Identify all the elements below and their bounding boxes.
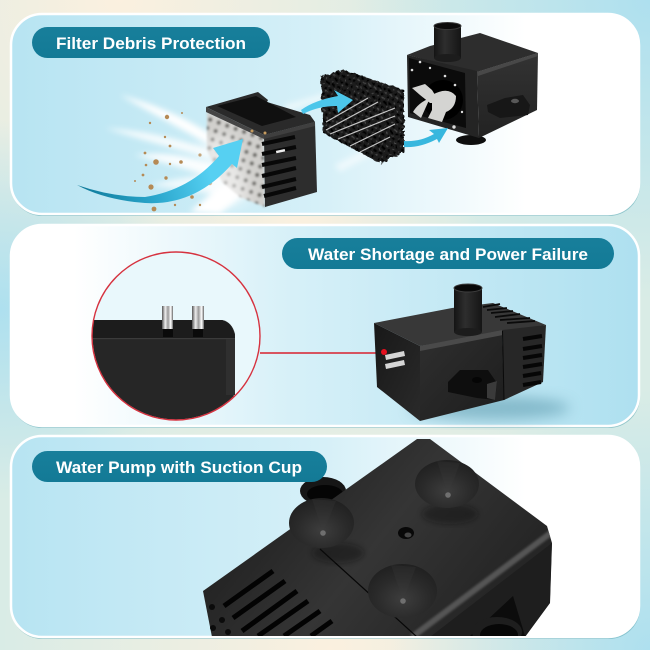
lower blue arrow <box>404 128 448 147</box>
heading pill: filter debris protection <box>32 27 270 58</box>
heading pill: water shortage <box>282 238 614 269</box>
middle blue arrow <box>301 90 353 114</box>
filter cage <box>200 92 317 210</box>
heading pill: suction cup: Water Pump with Suction Cup <box>56 458 302 477</box>
magnified circle callout <box>92 252 260 420</box>
pump with impeller exposed <box>407 22 538 145</box>
heading pill: water shortage: Water Shortage and Power Failure <box>308 245 588 264</box>
mounting tab <box>487 95 530 118</box>
suction cup 1 <box>289 498 354 548</box>
foam filter <box>321 70 404 163</box>
heading pill: filter debris protection: Filter Debris Protection <box>56 34 246 53</box>
heading pill: suction cup <box>32 451 327 482</box>
panel: filter debris protection <box>11 14 640 216</box>
suction cup 3 <box>368 564 437 618</box>
screw hole <box>398 527 414 539</box>
magnified metal pins <box>162 306 204 329</box>
power pins <box>385 351 405 369</box>
impeller <box>412 84 456 122</box>
suction cup 2 <box>415 460 479 508</box>
vent slots <box>224 571 332 636</box>
panel: water shortage and power failure <box>11 225 640 428</box>
debris particles <box>134 112 212 211</box>
corner tab and ring <box>470 596 525 636</box>
side view pump <box>374 284 546 421</box>
large underside pump <box>203 439 552 647</box>
big blue arrow <box>77 139 243 203</box>
pump spout <box>434 22 461 62</box>
mounting tab <box>448 370 497 400</box>
red leader line <box>260 352 384 354</box>
panel: water pump with suction cup <box>11 436 640 647</box>
pump shadow <box>410 396 570 420</box>
air flow streaks <box>110 94 367 213</box>
pump spout <box>454 284 482 336</box>
red marker dot <box>381 349 387 355</box>
